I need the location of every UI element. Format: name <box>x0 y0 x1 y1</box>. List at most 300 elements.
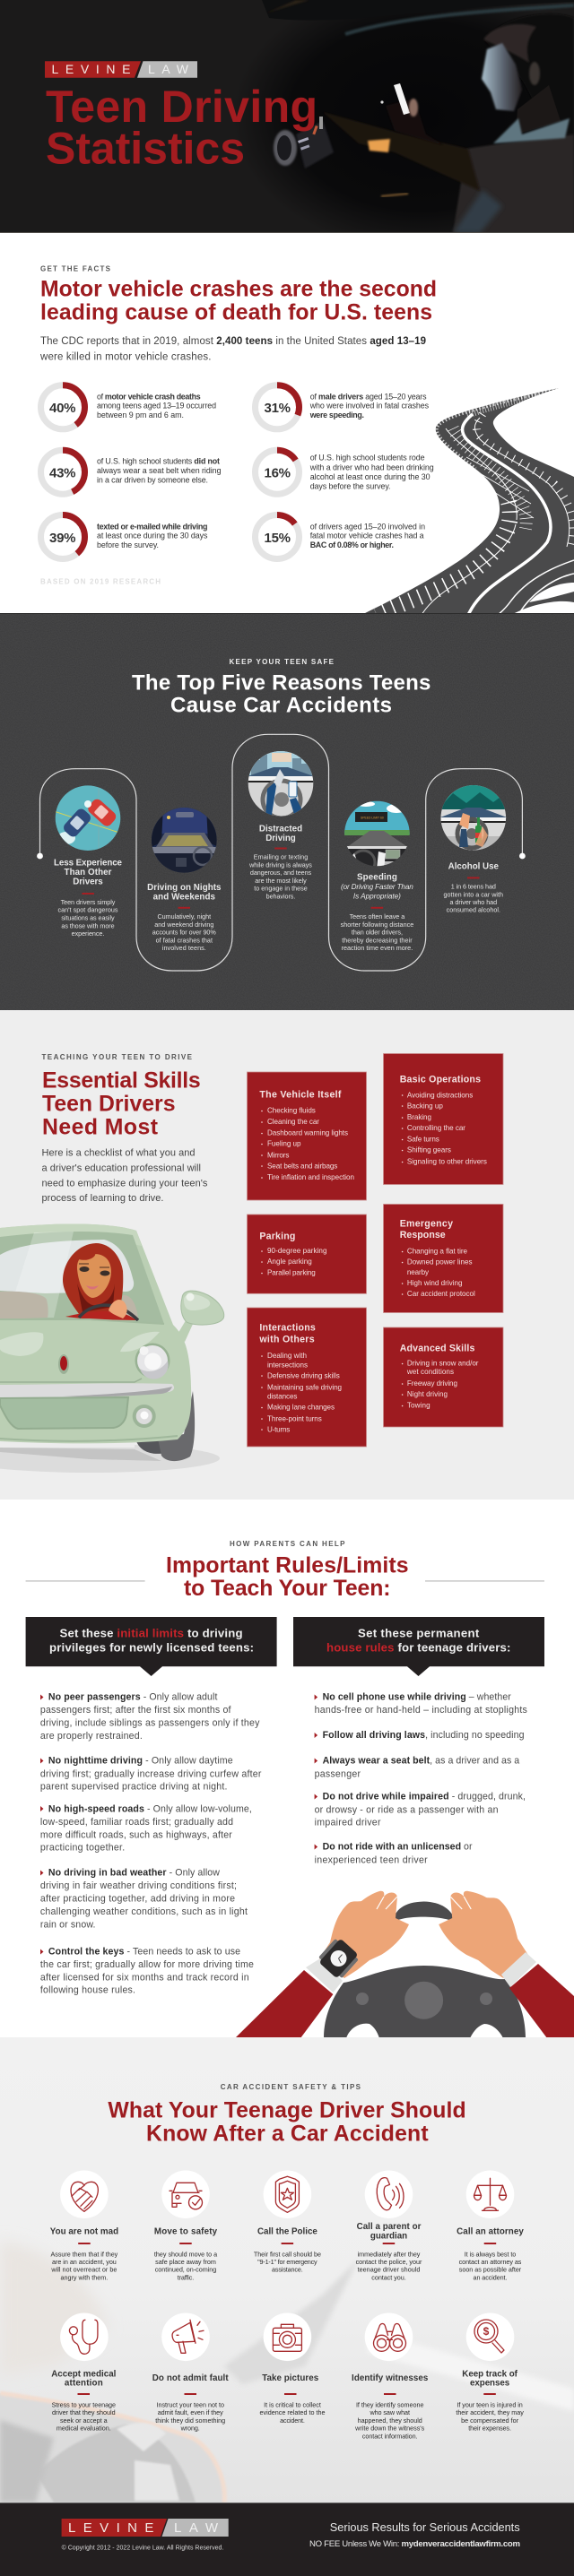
item: no driving in bad weather: driving in fair weather driving conditions first; <box>40 1880 237 1891</box>
tip: call an attorney <box>457 2171 524 2282</box>
box: advanced skills: Driving in snow and/or <box>407 1360 479 1368</box>
heading: Important Rules/Limits <box>166 1553 409 1578</box>
headlight <box>135 1343 170 1379</box>
reason 3: distracted driving: to engage in these <box>254 885 308 893</box>
teen face <box>482 43 522 111</box>
box: the vehicle itself: Mirrors <box>267 1151 289 1159</box>
tip: call a parent: immediately after they <box>358 2250 421 2258</box>
item: no cell phone <box>315 1692 527 1716</box>
badge <box>58 1354 69 1374</box>
item: no driving in bad weather: rain or snow. <box>40 1919 95 1930</box>
item: no driving in bad weather: after practicing together, add driving in more <box>40 1894 235 1905</box>
icon: heart handshake <box>71 2182 98 2211</box>
panel: rules and limits <box>26 1540 574 2038</box>
tip: call an attorney: soon as possible after <box>459 2266 522 2274</box>
smart watch <box>316 1936 361 1981</box>
shirt <box>65 1311 136 1320</box>
tip: keep track of expenses: expenses <box>470 2379 510 2389</box>
tread marks left <box>446 428 517 520</box>
callout: house rules <box>293 1617 544 1676</box>
box: parking: 90-degree parking <box>267 1247 326 1255</box>
left cuff <box>306 1958 343 1993</box>
item: always wear a seat belt: Always wear a seat belt, as a driver and as a <box>323 1756 519 1767</box>
box: the vehicle itself: Tire inflation and inspection <box>267 1173 354 1181</box>
footer logo: LAW <box>174 2520 219 2536</box>
tip: identify witnesses: If they identify someone <box>356 2400 423 2408</box>
box: basic operations: Braking <box>407 1113 431 1121</box>
tip: keep track of expenses: be compensated for <box>461 2416 519 2425</box>
panel: after a car accident <box>0 2037 574 2503</box>
heading: Need Most <box>42 1116 158 1140</box>
reason 4: speeding <box>341 800 413 952</box>
reason 3: distracted driving: while driving is always <box>248 860 312 869</box>
ground shadow <box>0 1444 220 1473</box>
title: Statistics <box>46 124 245 174</box>
paragraph: a driver's education professional will <box>41 1163 201 1173</box>
box: parking <box>248 1215 366 1293</box>
tip: call the police: Call the Police <box>257 2227 317 2237</box>
reason 5: alcohol use: 1 in 6 teens had <box>451 882 496 890</box>
item: do not drive while impaired: or drowsy - or ride as a passenger with an <box>315 1804 499 1815</box>
tip: call an attorney: It is always best to <box>465 2250 516 2258</box>
grille <box>0 1397 128 1429</box>
tip: accept medical attention: seek or accept a <box>60 2416 108 2425</box>
eyebrow: KEEP YOUR TEEN SAFE <box>230 658 335 666</box>
item: no high-speed roads: low-speed, familiar roads first; gradually add <box>40 1817 233 1828</box>
window frame <box>0 1232 164 1324</box>
hood line and highlights <box>0 1319 164 1324</box>
tip: call the police: assistance. <box>272 2266 303 2274</box>
box: the vehicle itself: Dashboard warning lights <box>267 1129 348 1137</box>
reason 3: distracted driving: behaviors. <box>266 892 295 900</box>
item: do not ride unlicensed: inexperienced teen driver <box>315 1854 428 1865</box>
heading: Essential Skills <box>42 1068 201 1093</box>
tip: call a parent: guardian <box>370 2232 407 2242</box>
box: interactions with others <box>248 1308 366 1447</box>
callout: initial limits: Set these initial limits to driving <box>59 1627 242 1640</box>
seats <box>0 1292 48 1319</box>
item: do not drive while impaired: Do not drive while impaired - drugged, drunk, <box>323 1792 526 1802</box>
box: emergency response: Emergency <box>400 1218 453 1229</box>
wheel hub details <box>404 1982 443 2019</box>
tip: take pictures: It is critical to collect <box>264 2400 321 2408</box>
item: do not drive while impaired <box>315 1792 526 1828</box>
chrome bumper <box>0 1383 174 1397</box>
tip: accept medical attention <box>51 2312 117 2433</box>
item: no high-speed roads: practicing together. <box>40 1843 125 1854</box>
item: follow all driving laws: Follow all driving laws, including no speeding <box>323 1730 525 1741</box>
heading: leading cause of death for U.S. teens <box>40 301 432 325</box>
teen hair and neck <box>509 13 574 63</box>
donut: 40%: among teens aged 13–19 occurred <box>97 402 216 411</box>
reason 2: nights and weekends: of fatal crashes that <box>156 936 213 944</box>
reason 2: nights and weekends <box>147 807 222 952</box>
item: no nighttime driving: No nighttime driving - Only allow daytime <box>48 1756 233 1767</box>
item: no nighttime driving: driving first; gradually increase driving curfew after <box>40 1768 262 1779</box>
callout: house rules: Set these permanent <box>358 1627 480 1640</box>
car body <box>0 1223 191 1443</box>
heading <box>26 1553 544 1601</box>
reason 1: less experience: can't spot dangerous <box>57 906 118 914</box>
woman <box>63 1243 138 1320</box>
reason 3: distracted driving: are the most likely <box>255 877 307 885</box>
donut: 16%: with a driver who had been drinking <box>309 463 434 472</box>
box: emergency response <box>384 1205 503 1312</box>
right sleeve <box>509 1964 574 2038</box>
intro paragraph: were killed in motor vehicle crashes. <box>39 352 212 363</box>
donut: 43% <box>41 450 222 494</box>
text: Less Experience <box>54 859 123 869</box>
donut: 40%: of motor vehicle crash deaths <box>97 392 201 401</box>
donut: 16%: 16% <box>264 465 291 480</box>
donut: 43%: 43% <box>49 465 75 480</box>
fog light <box>133 1405 156 1428</box>
item: no cell phone: hands-free or hand-held – including at stoplights <box>315 1705 527 1716</box>
item: control the keys: Control the keys - Teen needs to ask to use <box>48 1947 240 1958</box>
reason 2: nights and weekends: involved teens. <box>162 944 206 952</box>
icon: bottle at wheel <box>440 784 507 854</box>
tip: you are not mad: are in an accident, you <box>52 2258 117 2266</box>
copyright: © Copyright 2012 - 2022 Levine Law. All Rights Reserved. <box>62 2544 223 2551</box>
box: basic operations <box>384 1054 503 1185</box>
donut: 15% <box>255 514 425 559</box>
icon: speed limit dashboard: SPEED LIMIT 60 <box>361 816 384 819</box>
center stripe <box>463 414 551 615</box>
icon: car collision <box>54 784 122 852</box>
box: basic operations: Safe turns <box>407 1136 439 1144</box>
reason 1: less experience: Than Other <box>65 868 112 877</box>
box: advanced skills: Night driving <box>407 1390 448 1398</box>
box: emergency response: High wind driving <box>407 1279 463 1287</box>
tip: you are not mad: angry with them. <box>61 2274 108 2282</box>
reason 3: distracted driving: Emailing or texting <box>254 853 308 861</box>
item: no peer passengers: are properly restrained. <box>40 1731 143 1742</box>
wheel top <box>393 1902 456 1923</box>
callout: house rules: house rules for teenage drivers: <box>326 1641 510 1655</box>
tip: identify witnesses: who saw what <box>369 2408 410 2416</box>
tip: do not admit fault: think they did something <box>155 2416 225 2425</box>
illustration: woman driving green car <box>0 1223 224 1473</box>
icon: camera <box>273 2324 301 2351</box>
tip: identify witnesses <box>352 2312 429 2440</box>
box: basic operations: Avoiding distractions <box>407 1091 473 1099</box>
steering wheel and hand <box>79 1305 138 1320</box>
heading: Know After a Car Accident <box>146 2122 429 2147</box>
tip: identify witnesses: Identify witnesses <box>352 2373 429 2383</box>
reason 1: less experience: as those with more <box>61 921 115 929</box>
tread marks right <box>474 418 570 547</box>
box: basic operations: Backing up <box>407 1102 443 1110</box>
heading: Cause Car Accidents <box>170 694 392 718</box>
heading <box>42 1068 201 1140</box>
logo <box>45 61 197 78</box>
donut: 39%: before the survey. <box>97 540 159 549</box>
item: do not ride unlicensed: Do not ride with an unlicensed or <box>323 1842 473 1853</box>
donut: 15%: BAC of 0.08% or higher. <box>310 540 394 549</box>
box: interactions with others: Interactions <box>259 1323 316 1334</box>
heading: What Your Teenage Driver Should <box>108 2098 466 2122</box>
right hand <box>439 1891 529 1978</box>
item: no high-speed roads: more difficult roads, such as highways, after <box>40 1829 232 1840</box>
tagline: Serious Results for Serious Accidents <box>330 2520 520 2534</box>
box: the vehicle itself: The Vehicle Itself <box>259 1090 342 1101</box>
footer logo <box>62 2519 229 2537</box>
intro paragraph: The CDC reports that in 2019, almost 2,400 teens in the United States aged 13–19 <box>40 336 426 347</box>
box: the vehicle itself: Checking fluids <box>267 1107 316 1115</box>
heading: The Top Five Reasons Teens <box>132 670 430 695</box>
eyebrow: CAR ACCIDENT SAFETY & TIPS <box>221 2083 361 2091</box>
reason 2: nights and weekends: and Weekends <box>153 892 216 902</box>
reason 2: nights and weekends: and weekend driving <box>154 921 213 929</box>
donut: 40%: 40% <box>49 401 75 416</box>
tip: call the police: Their first call should be <box>254 2250 321 2258</box>
reason 1: less experience: experience. <box>72 929 104 938</box>
tip: do not admit fault <box>152 2312 229 2433</box>
donut: 16%: alcohol at least once during the 30 <box>310 472 430 481</box>
tip: call an attorney: Call an attorney <box>457 2227 524 2237</box>
donut: 40%: between 9 pm and 6 am. <box>97 411 184 419</box>
left hand <box>318 1891 409 1978</box>
faded crash photo <box>0 2241 574 2503</box>
reason 4: speeding: Teens often leave a <box>350 912 404 921</box>
text: Speeding <box>357 873 397 883</box>
paragraph: process of learning to drive. <box>41 1193 163 1204</box>
tip: keep track of expenses <box>456 2312 524 2433</box>
item: control the keys: following house rules. <box>40 1985 135 1996</box>
box: emergency response: Response <box>400 1230 446 1240</box>
reason 3: distracted driving: dangerous, and teens <box>250 869 312 877</box>
donut: 39% <box>41 514 208 559</box>
item: no peer passengers: No peer passengers - Only allow adult <box>48 1692 217 1703</box>
list: initial limits <box>40 1692 262 1996</box>
box: advanced skills: wet conditions <box>406 1368 454 1376</box>
hood seam <box>0 1379 142 1382</box>
heading <box>40 278 437 325</box>
item: do not ride unlicensed <box>315 1842 473 1865</box>
icon: magnifier with dollar: $ <box>483 2325 490 2338</box>
tip: call the police: "9-1-1" for emergency <box>257 2258 317 2266</box>
box: interactions with others: U-turns <box>267 1425 290 1433</box>
reason 5: alcohol use: a driver who had <box>449 898 497 906</box>
orange light <box>368 139 390 152</box>
lower trim <box>0 1436 178 1441</box>
item: no peer passengers <box>40 1692 260 1742</box>
tip: take pictures: evidence related to the <box>260 2408 325 2416</box>
icon: police badge <box>275 2176 299 2212</box>
instrument gauge <box>274 130 297 166</box>
donut: 43%: always wear a seat belt when riding <box>97 466 222 475</box>
tip: you are not mad: Assure them that if they <box>51 2250 118 2258</box>
box: interactions with others: with Others <box>258 1334 315 1344</box>
box: the vehicle itself: Seat belts and airbags <box>267 1162 337 1170</box>
donut: 15%: fatal motor vehicle crashes had a <box>310 532 424 540</box>
tip: take pictures: accident. <box>280 2416 305 2425</box>
donut: 15%: of drivers aged 15–20 involved in <box>310 522 425 531</box>
reason 1: less experience: Drivers <box>73 877 103 886</box>
icon: stethoscope <box>69 2320 98 2354</box>
donut: 43%: of U.S. high school students did not <box>97 457 220 466</box>
item: no peer passengers: passengers first; after the first six months of <box>40 1705 231 1716</box>
box: parking: Angle parking <box>267 1258 312 1266</box>
tip: you are not mad <box>50 2171 118 2282</box>
box: advanced skills: Advanced Skills <box>400 1343 474 1353</box>
reason 4: speeding: thereby decreasing their <box>342 936 413 944</box>
box: parking: Parking <box>259 1232 295 1242</box>
icon: scales of justice <box>474 2178 506 2210</box>
item: no high-speed roads: No high-speed roads - Only allow low-volume, <box>48 1803 252 1814</box>
teen shirt <box>453 134 574 233</box>
heading <box>108 2098 466 2147</box>
donut: 31% <box>255 385 430 429</box>
panel: hero <box>0 0 574 251</box>
item: no driving in bad weather: No driving in bad weather - Only allow <box>48 1868 220 1879</box>
logo: LEVINE <box>52 62 131 76</box>
box: advanced skills: Freeway driving <box>407 1379 457 1387</box>
tip: accept medical attention: attention <box>65 2379 103 2389</box>
icon: megaphone <box>172 2320 204 2353</box>
photo: teen driving with phone <box>260 0 574 232</box>
reason 4: speeding: than older drivers, <box>352 929 403 937</box>
eyebrow: TEACHING YOUR TEEN TO DRIVE <box>41 1053 193 1061</box>
reason 4: speeding: shorter following distance <box>341 921 413 929</box>
donut: 31%: of male drivers aged 15–20 years <box>310 392 427 401</box>
panel: top five reasons <box>0 613 574 1010</box>
item: no driving in bad weather <box>40 1868 248 1930</box>
tip: keep track of expenses: their accident, they may <box>456 2408 524 2416</box>
donut: 40% <box>41 385 216 429</box>
tip: move to safety: continued, on-coming <box>155 2266 216 2274</box>
donut: 15%: 15% <box>264 531 291 546</box>
box: basic operations: Basic Operations <box>400 1074 481 1085</box>
tip: accept medical attention: Accept medical <box>51 2369 117 2379</box>
icon: car with check <box>170 2183 203 2209</box>
wheel cutouts <box>346 2024 379 2038</box>
box: interactions with others: Dealing with <box>267 1352 307 1360</box>
no fee line: NO FEE Unless We Win: mydenveraccidentlawfirm.com <box>309 2539 520 2549</box>
eyebrow: GET THE FACTS <box>40 265 111 272</box>
icon: night dashboard <box>152 808 217 873</box>
reason 4: speeding: reaction time even more. <box>342 944 413 952</box>
box: the vehicle itself <box>248 1072 366 1200</box>
reason 1: less experience <box>54 784 123 938</box>
tip: you are not mad: You are not mad <box>50 2227 118 2237</box>
box: basic operations: Signaling to other drivers <box>407 1158 487 1166</box>
item: control the keys <box>40 1947 254 1996</box>
item: no peer passengers: driving, include siblings as passengers only if they <box>40 1718 260 1729</box>
heading: Teen Drivers <box>42 1092 176 1116</box>
icon: speed limit dashboard <box>344 801 410 866</box>
box: basic operations: Controlling the car <box>407 1124 465 1132</box>
callout: initial limits <box>26 1617 277 1676</box>
panel: get the facts <box>39 265 574 615</box>
box: the vehicle itself: Fueling up <box>267 1140 301 1148</box>
heading <box>132 670 430 718</box>
tip: accept medical attention: medical evaluation. <box>57 2425 111 2433</box>
right cuff <box>501 1952 536 1987</box>
box: interactions with others: Defensive driving skills <box>267 1371 340 1379</box>
tip: take pictures: Take pictures <box>262 2373 319 2383</box>
wheel body <box>324 1966 526 2038</box>
hair <box>63 1243 123 1314</box>
tip: accept medical attention: Stress to your teenage <box>52 2400 116 2408</box>
item: do not drive while impaired: impaired driver <box>315 1818 381 1828</box>
paragraph: Here is a checklist of what you and <box>41 1148 196 1159</box>
reason 3: distracted driving <box>248 751 314 900</box>
teen arm <box>323 112 480 191</box>
icon: phone at wheel <box>248 751 314 821</box>
tip: call a parent: contact you. <box>371 2274 406 2282</box>
panel: essential skills <box>0 1010 574 1500</box>
tip: call an attorney: an accident. <box>474 2274 507 2282</box>
text: Distracted <box>259 824 302 834</box>
heading: Motor vehicle crashes are the second <box>40 278 437 302</box>
title <box>46 82 317 174</box>
phone screen <box>394 83 410 115</box>
tip: keep track of expenses: Keep track of <box>462 2369 518 2379</box>
box: emergency response: Downed power lines <box>407 1258 472 1266</box>
tip: move to safety: they should move to a <box>154 2250 217 2258</box>
tip: identify witnesses: write down the witness's <box>354 2425 425 2433</box>
box: emergency response: Car accident protocol <box>407 1290 475 1298</box>
serpentine connector <box>37 734 526 971</box>
tip: do not admit fault: admit fault, even if they <box>158 2408 223 2416</box>
item: no cell phone: No cell phone use while driving – whether <box>323 1692 511 1703</box>
tip: call a parent: teenage driver should <box>358 2266 420 2274</box>
item: always wear a seat belt: passenger <box>315 1768 361 1779</box>
tip: call an attorney: contact an attorney as <box>459 2258 522 2266</box>
tip: you are not mad: will not overreact or be <box>50 2266 117 2274</box>
donut: 31%: were speeding. <box>309 411 364 419</box>
heading: to Teach Your Teen: <box>184 1577 391 1601</box>
box: emergency response: Changing a flat tire <box>407 1248 467 1256</box>
box: interactions with others: distances <box>267 1392 297 1400</box>
tip: call a parent: contact the police, your <box>356 2258 422 2266</box>
reason 1: less experience: situations as easily <box>61 913 115 921</box>
item: no high-speed roads <box>40 1803 252 1854</box>
donut: 16% <box>255 450 434 494</box>
reason 2: nights and weekends: Cumulatively, night <box>158 912 211 921</box>
box: emergency response: nearby <box>407 1268 430 1276</box>
reason 5: alcohol use <box>440 784 507 914</box>
reason 4: speeding: (or Driving Faster Than <box>341 883 413 891</box>
box: interactions with others: intersections <box>267 1361 308 1369</box>
item: control the keys: the car first; gradually allow for more driving time <box>40 1959 254 1970</box>
item: control the keys: after licensed for six months and track record in <box>40 1972 249 1983</box>
reason 5: alcohol use: consumed alcohol. <box>447 906 500 914</box>
tip: do not admit fault: Instruct your teen not to <box>156 2400 224 2408</box>
paragraph <box>41 1148 208 1204</box>
tip: move to safety: traffic. <box>178 2274 194 2282</box>
box: interactions with others: Three-point turns <box>267 1414 322 1422</box>
tip: move to safety: Move to safety <box>154 2227 218 2237</box>
left sleeve <box>235 1970 333 2038</box>
icon: binoculars <box>373 2323 405 2351</box>
donut: 31%: who were involved in fatal crashes <box>309 402 430 411</box>
item: no nighttime driving: parent supervised practice driving at night. <box>40 1782 228 1793</box>
box: advanced skills: Towing <box>407 1402 430 1410</box>
donut: 43%: in a car driven by someone else. <box>97 475 208 484</box>
text: Driving on Nights <box>147 883 222 893</box>
item: no driving in bad weather: challenging weather conditions, such as in light <box>40 1906 248 1917</box>
reason 5: alcohol use: gotten into a car with <box>444 890 503 898</box>
list: house rules <box>315 1692 527 1865</box>
logo: LAW <box>148 62 189 76</box>
reason 4: speeding: Is Appropriate) <box>353 892 401 900</box>
tip: keep track of expenses: their expenses. <box>468 2425 511 2433</box>
eyebrow: HOW PARENTS CAN HELP <box>230 1540 345 1548</box>
footer <box>0 2503 574 2576</box>
paragraph: need to emphasize during your teen's <box>41 1178 208 1189</box>
